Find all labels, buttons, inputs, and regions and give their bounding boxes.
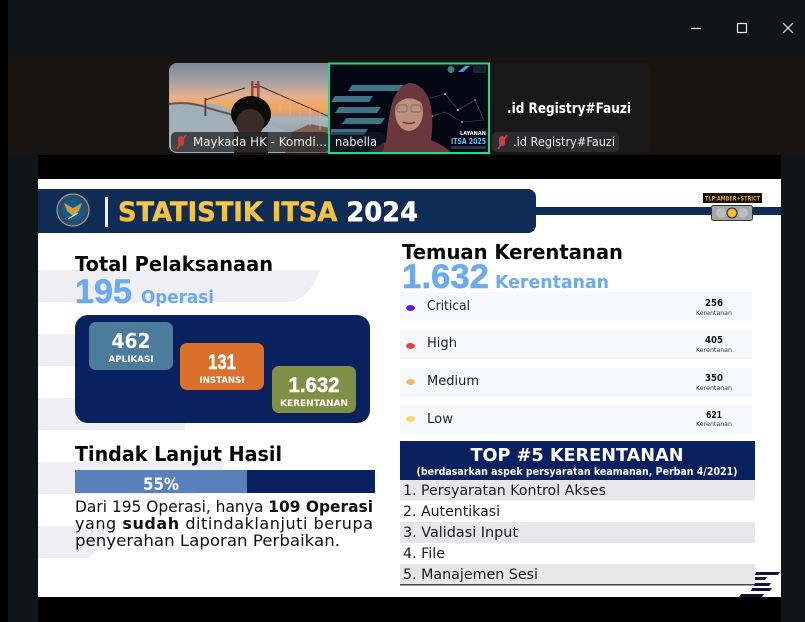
stat: 1.632 kerentanan xyxy=(402,258,609,296)
name tag: Maykada: Maykada HK - Komdi... xyxy=(193,134,327,149)
row: critical: Critical xyxy=(427,299,470,314)
list items xyxy=(403,483,606,583)
name tag: nabella: nabella xyxy=(335,134,377,149)
icon: agency emblem xyxy=(57,194,89,226)
heading: tindak lanjut: Tindak Lanjut Hasil xyxy=(75,442,282,466)
panel: top 5 kerentanan xyxy=(400,441,755,586)
list items: 1. Persyaratan Kontrol Akses xyxy=(403,483,606,499)
paragraph: penyerahan Laporan Perbaikan. xyxy=(75,531,340,550)
heading: total pelaksanaan: Total Pelaksanaan xyxy=(75,252,273,276)
TLP label: TLP:AMBER+STRICT xyxy=(705,194,760,202)
stat: 195 operasi: Operasi xyxy=(141,287,214,308)
top 5 header xyxy=(400,441,755,480)
panel: temuan kerentanan xyxy=(400,240,752,434)
stat: 1.632 kerentanan: 1.632 xyxy=(402,258,489,296)
row: critical: 256 xyxy=(705,298,723,309)
row: medium: 350 xyxy=(705,373,723,384)
name tag: Maykada xyxy=(171,132,329,152)
list items: 4. File xyxy=(403,546,445,562)
slide header banner xyxy=(38,189,781,233)
top 5 header: (berdasarkan aspek persyaratan keamanan, Perban 4/2021) xyxy=(416,466,738,478)
participant: nabella: ITSA 2025 xyxy=(451,137,486,146)
row: low: Low xyxy=(427,412,453,427)
row: low: 621 xyxy=(706,410,722,421)
row: critical xyxy=(400,292,752,321)
row: medium: Medium xyxy=(427,374,479,389)
icon: traffic light xyxy=(712,206,752,220)
card: aplikasi: 462 xyxy=(112,329,150,353)
name tag: nabella xyxy=(330,132,384,152)
row: high: 405 xyxy=(705,335,723,346)
TLP label xyxy=(703,193,762,203)
card: instansi: INSTANSI xyxy=(200,376,244,386)
top 5 header: TOP #5 KERENTANAN xyxy=(470,445,684,466)
card: aplikasi xyxy=(89,322,173,370)
card: kerentanan: 1.632 xyxy=(288,374,340,397)
stat: 1.632 kerentanan: Kerentanan xyxy=(495,272,609,293)
participant: nabella: LAYANAN xyxy=(460,131,486,137)
card: instansi xyxy=(180,343,264,390)
heading: temuan kerentanan: Temuan Kerentanan xyxy=(402,240,623,264)
paragraph: yang sudah ditindaklanjuti berupa xyxy=(75,514,373,533)
stat: 195 operasi: 195 xyxy=(75,273,132,311)
stat: 195 operasi xyxy=(75,273,214,311)
row: critical: Kerentanan xyxy=(696,310,732,317)
panel: total pelaksanaan xyxy=(75,252,370,423)
row: high: Kerentanan xyxy=(696,347,732,354)
row: medium: Kerentanan xyxy=(696,385,732,392)
row: low xyxy=(400,405,752,434)
progress bar: 55% xyxy=(143,475,179,495)
card: kerentanan: KERENTANAN xyxy=(280,399,348,409)
card: aplikasi: APLIKASI xyxy=(108,355,154,365)
list items: 2. Autentikasi xyxy=(403,504,500,520)
participant: Maykada HK xyxy=(169,63,330,153)
row: medium xyxy=(400,368,752,397)
summary box xyxy=(75,315,370,423)
list items: 3. Validasi Input xyxy=(403,525,519,541)
participant: .id Registry#Fauzi: .id Registry#Fauzi xyxy=(507,101,631,117)
card: kerentanan xyxy=(272,366,356,413)
participant: .id Registry#Fauzi xyxy=(490,63,650,153)
window controls xyxy=(691,23,793,33)
progress bar xyxy=(75,470,375,495)
row: low: Kerentanan xyxy=(696,421,732,428)
row: high: High xyxy=(427,336,457,351)
card: instansi: 131 xyxy=(208,351,236,374)
paragraph xyxy=(75,497,373,550)
name tag: Fauzi xyxy=(492,132,619,152)
paragraph: Dari 195 Operasi, hanya 109 Operasi xyxy=(75,497,373,516)
list items: 5. Manajemen Sesi xyxy=(403,567,538,583)
participant: nabella xyxy=(329,63,489,153)
shared slide area xyxy=(38,155,781,622)
icon: corner logo xyxy=(739,572,780,597)
name tag: Fauzi: .id Registry#Fauzi xyxy=(513,134,615,149)
title: STATISTIK ITSA 2024 xyxy=(118,197,418,228)
panel: tindak lanjut hasil xyxy=(75,442,375,550)
row: high xyxy=(400,330,752,359)
